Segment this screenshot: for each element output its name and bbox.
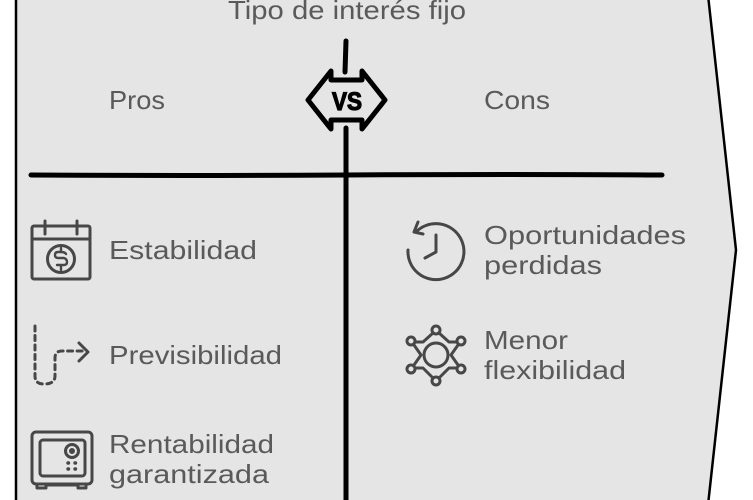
icon: six-point star bbox=[407, 326, 465, 385]
text: Rentabilidad garantizada bbox=[109, 429, 274, 489]
text: Oportunidades perdidas bbox=[484, 220, 686, 280]
text: Oportunidades perdidas: Oportunidades bbox=[484, 220, 686, 250]
text: Rentabilidad garantizada: Rentabilidad bbox=[109, 429, 274, 459]
divider: horizontal rule bbox=[31, 174, 662, 176]
icon: VS badge bbox=[308, 71, 385, 129]
heading: Cons: Cons bbox=[484, 85, 550, 115]
text: Menor flexibilidad: Menor bbox=[484, 325, 568, 355]
text: Previsibilidad: Previsibilidad bbox=[109, 340, 282, 370]
text: Oportunidades perdidas: perdidas bbox=[484, 250, 602, 280]
text: Menor flexibilidad bbox=[484, 325, 626, 385]
icon: safe bbox=[32, 432, 92, 488]
heading: Pros: Pros bbox=[109, 85, 165, 115]
icon: calendar with dollar bbox=[32, 221, 90, 279]
text: Estabilidad: Estabilidad bbox=[109, 235, 257, 265]
text: Rentabilidad garantizada: garantizada bbox=[109, 459, 270, 489]
icon: clock with back arrow bbox=[408, 222, 464, 280]
icon: VS badge: VS bbox=[332, 88, 362, 116]
text: Menor flexibilidad: flexibilidad bbox=[484, 355, 626, 385]
divider: vertical rule bbox=[345, 41, 346, 500]
icon: dashed path arrow bbox=[35, 326, 88, 384]
